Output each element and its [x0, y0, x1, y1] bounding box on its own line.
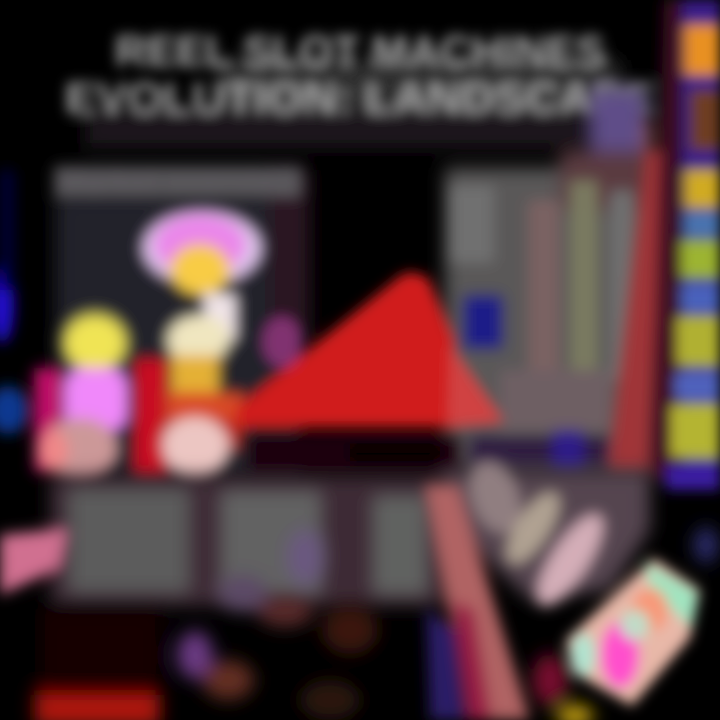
diagonal red road	[425, 485, 530, 720]
panel: left card	[55, 170, 310, 475]
title: EVOLUTION: LANDSCAPE	[65, 74, 655, 123]
right decorative strip of lights	[666, 0, 720, 490]
title	[65, 27, 655, 123]
shadow under chart	[250, 436, 460, 472]
area chart: red peak	[236, 272, 504, 427]
side red stripe	[608, 0, 684, 480]
title: REEL SLOT MACHINES	[115, 27, 605, 76]
center tall figure	[142, 210, 262, 477]
bottom stat cards	[68, 488, 428, 595]
stat card accents	[219, 529, 378, 654]
bottom band background	[50, 476, 445, 606]
left pink bar	[0, 528, 68, 595]
left tall figure	[34, 308, 169, 478]
title backing	[85, 60, 620, 148]
right card columns	[450, 180, 634, 468]
left edge glow	[0, 170, 28, 434]
colorful tile	[566, 558, 700, 706]
panel heading: left card: Market overview	[58, 167, 298, 198]
panel: right card	[445, 90, 652, 468]
diagonal panel and pills	[440, 470, 650, 600]
stat card 1	[68, 488, 190, 593]
stat card 3	[372, 495, 428, 595]
stat card 2	[220, 490, 322, 595]
bottom glow shapes	[35, 527, 718, 720]
